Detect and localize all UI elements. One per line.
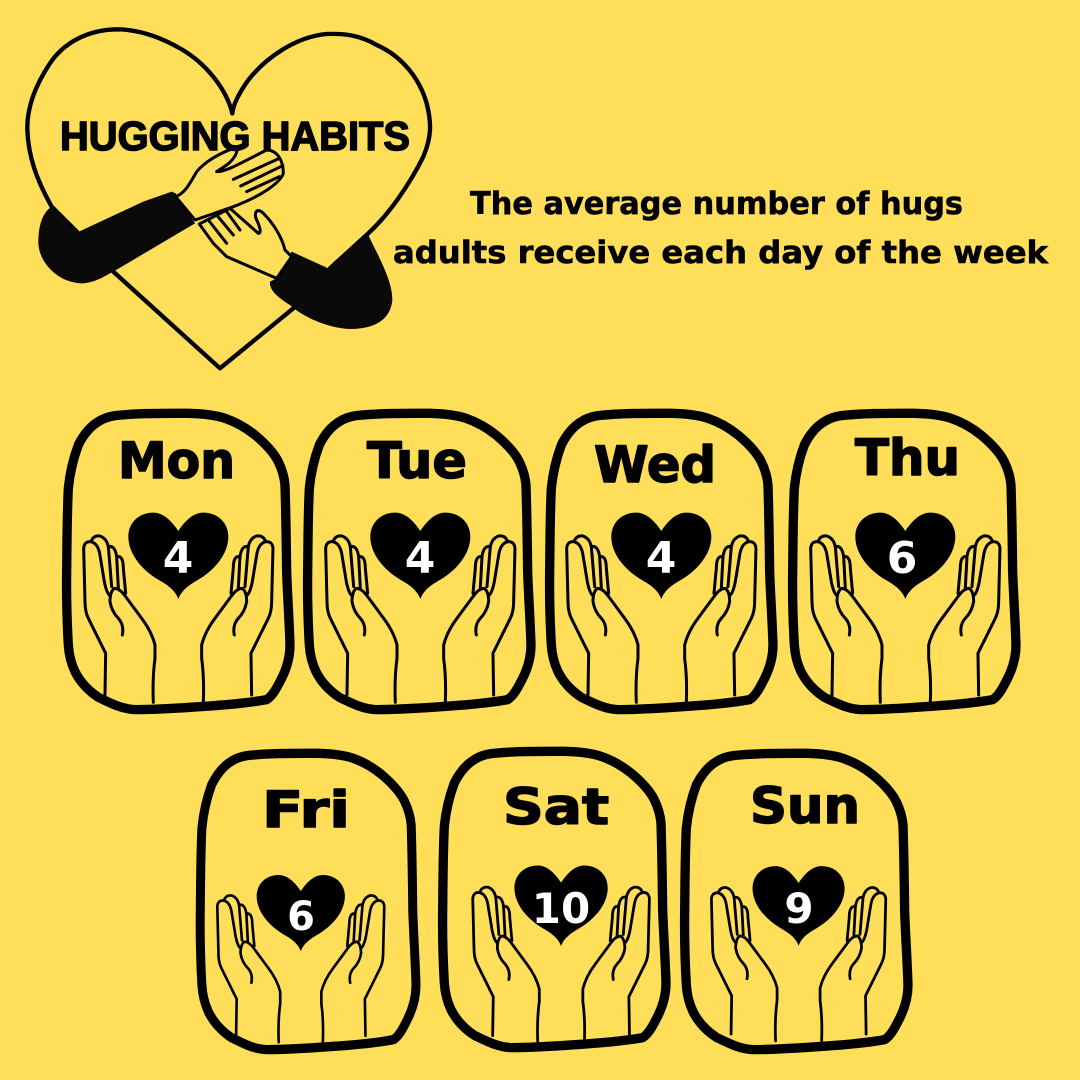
card: Saturday: 10 xyxy=(532,884,590,933)
card: Tuesday xyxy=(308,413,531,710)
card: Friday: Fri xyxy=(262,781,350,839)
card: Tuesday: Tue xyxy=(367,432,467,490)
card: Saturday xyxy=(443,751,666,1048)
title: HUGGING HABITS xyxy=(60,113,410,159)
left sleeve xyxy=(38,192,195,283)
card: Saturday: Sat xyxy=(503,778,609,836)
right sleeve xyxy=(270,235,392,329)
heart outline xyxy=(27,29,430,368)
lower hand xyxy=(199,208,292,278)
illustration: heart with hugging arms xyxy=(27,29,430,368)
card: Friday xyxy=(200,753,416,1050)
card: Wednesday: Wed xyxy=(594,436,716,494)
upper hand xyxy=(176,148,283,220)
subtitle xyxy=(393,186,1049,271)
card: Monday xyxy=(67,413,290,710)
card: Monday: 4 xyxy=(163,533,193,584)
card: Thursday: 6 xyxy=(887,533,917,584)
subtitle: The average number of hugs xyxy=(470,186,963,222)
card: Thursday: Thu xyxy=(855,429,960,487)
subtitle: adults receive each day of the week xyxy=(393,235,1049,271)
card: Sunday xyxy=(685,753,908,1050)
card: Sunday: 9 xyxy=(784,884,814,933)
card: Friday: 6 xyxy=(287,894,315,940)
card: Monday: Mon xyxy=(118,432,235,490)
card: Wednesday: 4 xyxy=(646,533,676,584)
card: Thursday xyxy=(793,413,1016,710)
card: Sunday: Sun xyxy=(750,777,860,835)
card: Tuesday: 4 xyxy=(405,533,435,584)
card: Wednesday xyxy=(550,413,773,710)
